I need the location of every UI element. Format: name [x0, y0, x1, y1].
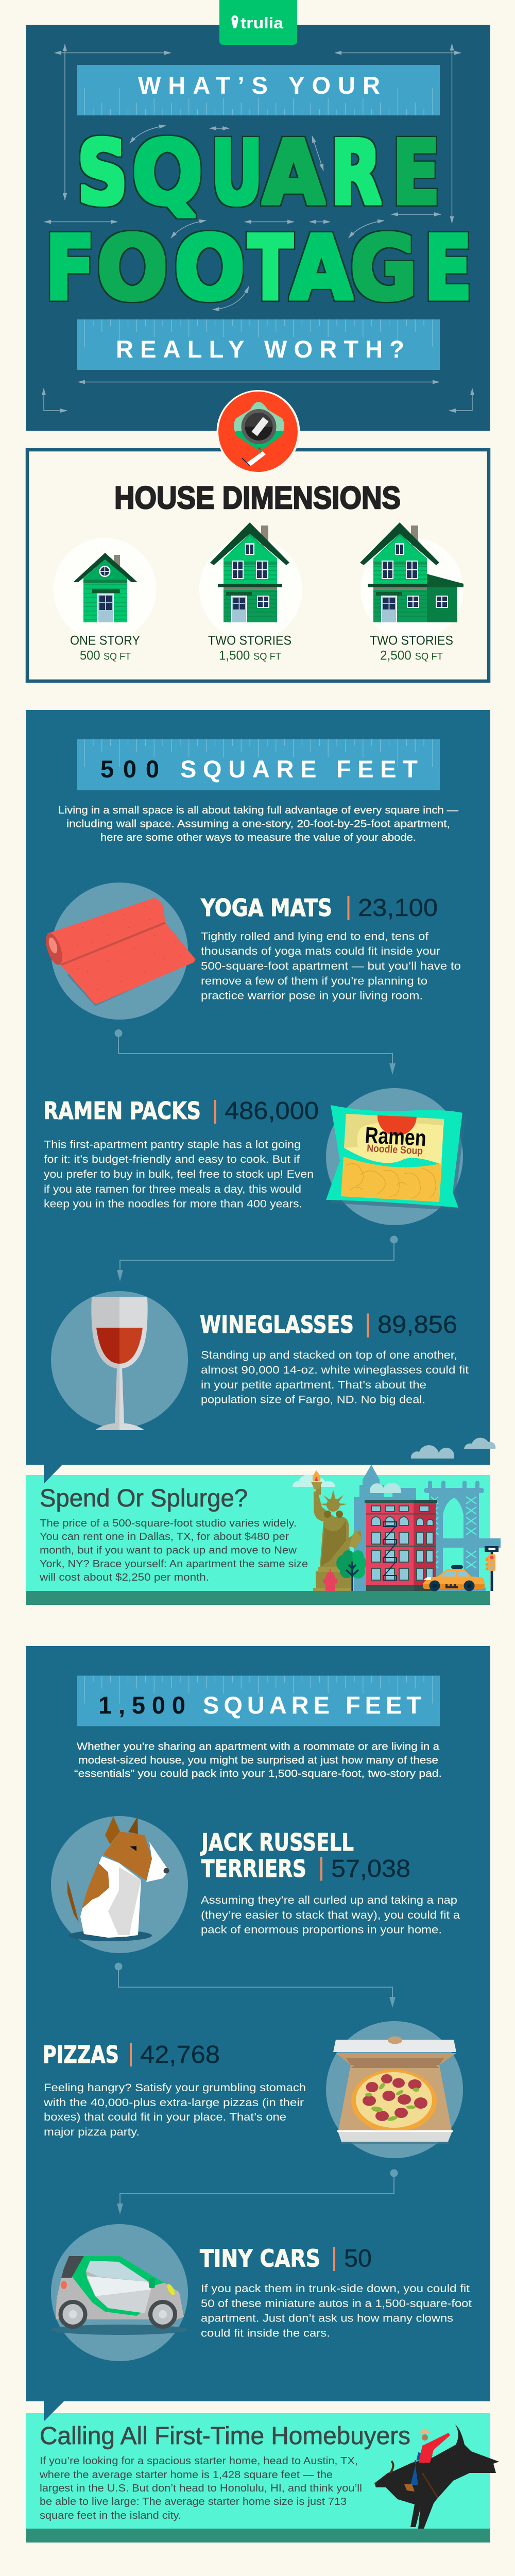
callout text: If you’re looking for a spacious starter home, head to Austin, TX,	[40, 2455, 358, 2467]
logo tab: trulia: trulia	[241, 14, 284, 32]
tree	[336, 1550, 367, 1591]
fire escape	[383, 1522, 397, 1580]
heading: calling all first-time homebuyers: Calling All First-Time Homebuyers	[40, 2422, 410, 2450]
panel: 500 square feet	[26, 710, 495, 1465]
labels: one story	[70, 634, 140, 663]
item: jack russell terriers: pack of enormous proportions in your home.	[201, 1924, 442, 1936]
item: pizzas: major pizza party.	[44, 2126, 140, 2138]
title: square footage: E	[424, 216, 472, 320]
item: wineglasses	[200, 1311, 469, 1405]
title: square footage: A	[290, 216, 352, 320]
item: wineglasses: population size of Fargo, ND. No big deal.	[201, 1394, 425, 1405]
item: wineglasses: in your petite apartment. That’s about the	[201, 1379, 426, 1391]
item: tiny cars: If you pack them in trunk-side down, you could fit	[201, 2283, 470, 2295]
title: square footage: S	[77, 121, 128, 225]
item: pizzas: boxes) that could fit in your place. That’s one	[44, 2111, 286, 2123]
item: tiny cars: 50	[344, 2245, 372, 2272]
item: jack russell terriers: Assuming they’re all curled up and taking a nap	[201, 1894, 457, 1906]
arrow: connector to pizzas	[114, 1963, 396, 2008]
intro text: Whether you’re sharing an apartment with a roommate or are living in a	[77, 1741, 440, 1753]
item: tiny cars: apartment. Just don’t ask us how many clowns	[201, 2312, 453, 2325]
intro text: Living in a small space is all about taking full advantage of every square inch —	[58, 805, 458, 816]
title: square footage: A	[263, 121, 324, 225]
labels: one story: ONE STORY	[70, 634, 140, 648]
taxi	[423, 1565, 485, 1591]
logo tab: trulia	[219, 0, 297, 45]
labels: two stories 2500: 2,500 SQ FT	[380, 648, 443, 663]
illustration: new york city	[293, 1465, 501, 1591]
intro text: including wall space. Assuming a one-story, 20-foot-by-25-foot apartment,	[66, 818, 450, 829]
item: wineglasses: almost 90,000 14-oz. white wineglasses could fit	[201, 1364, 469, 1376]
icon: wineglass	[51, 1291, 188, 1430]
item: pizzas: Feeling hangry? Satisfy your grumbling stomach	[44, 2082, 306, 2094]
item: ramen packs: 486,000	[225, 1097, 319, 1125]
item: tiny cars	[200, 2244, 472, 2339]
speech tail	[44, 2401, 64, 2421]
house: two stories 1500	[199, 522, 302, 641]
icon: ramen pack	[326, 1088, 466, 1225]
callout text: month, but if you want to pack up and move to New	[40, 1545, 297, 1556]
item: ramen packs: if you ate ramen for three meals a day, this would	[44, 1183, 301, 1195]
measuring arrows	[44, 44, 472, 411]
item: yoga mats: remove a few of them if you’re planning to	[201, 975, 427, 987]
ruler heading: 500 square feet	[77, 739, 440, 790]
callout text: where the average starter home is 1,428 square feet — the	[39, 2469, 333, 2481]
intro text	[58, 805, 458, 843]
ruler heading: 1500 square feet: SQUARE FEET	[203, 1691, 421, 1719]
item: tiny cars: 50 of these miniature autos in a 1,500-square-foot	[201, 2298, 472, 2310]
title: square footage	[45, 121, 472, 320]
arrow: connector to ramen	[114, 1029, 396, 1075]
callout text: will cost about $2,250 per month.	[39, 1572, 209, 1583]
ruler heading: what's your: WHAT’S YOUR	[138, 72, 380, 99]
intro text: here are some other ways to measure the value of your abode.	[100, 832, 416, 843]
ruler heading: really worth: REALLY WORTH?	[116, 335, 404, 363]
item: pizzas	[43, 2041, 306, 2138]
item: pizzas: 42,768	[140, 2041, 220, 2069]
traffic light	[485, 1546, 499, 1591]
arrow: connector to tiny cars	[117, 2169, 398, 2214]
item: jack russell terriers: TERRIERS	[201, 1855, 306, 1883]
callout: first-time homebuyers	[26, 2401, 499, 2543]
item: pizzas: PIZZAS	[43, 2041, 119, 2069]
heading: spend or splurge: Spend Or Splurge?	[40, 1485, 248, 1512]
title: square footage: G	[350, 216, 417, 320]
icon: ramen pack: Ramen	[364, 1123, 427, 1151]
callout: spend or splurge	[26, 1465, 501, 1605]
item: yoga mats	[200, 894, 461, 1002]
labels: two stories 1500: 1,500 SQ FT	[219, 648, 281, 663]
item: pizzas: with the 40,000-plus extra-large pizzas (in their	[43, 2097, 304, 2109]
item: ramen packs: keep you in the noodles for more than 400 years.	[44, 1198, 302, 1210]
callout text: The price of a 500-square-foot studio varies widely.	[40, 1518, 297, 1529]
title: square footage: T	[248, 216, 293, 320]
item: tiny cars: could fit inside the cars.	[201, 2328, 330, 2339]
title: square footage: U	[211, 121, 263, 225]
item: ramen packs: This first-apartment pantry staple has a lot going	[44, 1139, 301, 1151]
icon: clouds	[411, 1438, 495, 1459]
intro text	[74, 1741, 442, 1780]
title: square footage: O	[174, 216, 245, 320]
title: square footage: E	[392, 121, 440, 225]
icon: pizza box	[326, 2021, 463, 2158]
ruler heading: 500 square feet: 500	[100, 755, 159, 783]
speech tail	[44, 1465, 62, 1484]
intro text: “essentials” you could pack into your 1,500-square-foot, two-story pad.	[74, 1768, 442, 1780]
title: square footage: F	[45, 216, 95, 320]
callout text: largest in the U.S. But don’t head to Honolulu, HI, and think you’ll	[40, 2483, 362, 2494]
heading: house dimensions: HOUSE DIMENSIONS	[114, 480, 401, 515]
callout text: square feet in the island city.	[40, 2510, 181, 2521]
callout text	[39, 2455, 362, 2521]
item: ramen packs: RAMEN PACKS	[43, 1097, 201, 1125]
item: yoga mats: 23,100	[358, 894, 438, 922]
clouds	[293, 1475, 335, 1487]
item: ramen packs: for it: it’s budget-friendly and easy to cook. But if	[44, 1154, 300, 1165]
panel: house dimensions	[27, 450, 489, 681]
illustration: bull rider	[374, 2425, 499, 2529]
ruler heading: 1500 square feet: 1,500	[98, 1691, 185, 1719]
ruler heading: 1500 square feet	[77, 1675, 440, 1726]
item: yoga mats: 500-square-foot apartment — but you’ll have to	[201, 960, 461, 972]
item: wineglasses: Standing up and stacked on top of one another,	[201, 1349, 457, 1361]
labels: two stories 1500	[208, 634, 291, 663]
hydrant	[323, 1569, 337, 1591]
item: wineglasses: 89,856	[377, 1311, 457, 1338]
callout text: York, NY? Brace yourself: An apartment the same size	[40, 1558, 308, 1570]
labels: one story: 500 SQ FT	[80, 648, 131, 663]
panel: header	[26, 0, 490, 431]
item: wineglasses: WINEGLASSES	[200, 1311, 354, 1338]
item: ramen packs: you prefer to buy in bulk, feel free to stock up! Even	[44, 1168, 314, 1180]
item: yoga mats: thousands of yoga mats could fit inside your	[201, 945, 440, 957]
title: square footage: Q	[132, 121, 203, 225]
ruler heading: really worth	[77, 319, 440, 370]
item: yoga mats: practice warrior pose in your living room.	[201, 990, 423, 1002]
callout text	[39, 1518, 308, 1583]
arrow: connector to wineglasses	[117, 1235, 398, 1281]
item: yoga mats: YOGA MATS	[200, 894, 332, 922]
intro text: modest-sized house, you might be surprised at just how many of these	[78, 1755, 438, 1766]
ruler heading: 500 square feet: SQUARE FEET	[180, 755, 418, 783]
item: jack russell terriers: 57,038	[331, 1855, 410, 1883]
item: tiny cars: TINY CARS	[200, 2244, 320, 2272]
item: jack russell terriers: JACK RUSSELL	[200, 1828, 354, 1856]
labels: two stories 2500	[370, 634, 453, 663]
item: jack russell terriers	[200, 1828, 460, 1936]
item: yoga mats: Tightly rolled and lying end to end, tens of	[201, 930, 428, 943]
panel: 1500 square feet	[26, 1646, 490, 2401]
item: ramen packs	[43, 1097, 319, 1210]
statue of liberty	[311, 1470, 362, 1591]
brick building	[365, 1500, 437, 1591]
icon: tape measure badge	[216, 390, 300, 473]
labels: two stories 1500: TWO STORIES	[208, 634, 291, 648]
house: two stories 2500	[360, 522, 464, 641]
icon: tiny car	[51, 2224, 188, 2361]
item: jack russell terriers: (they’re easier to stack that way), you could fit a	[201, 1909, 460, 1921]
icon: yoga mat	[43, 883, 197, 1020]
icon: jack russell terrier	[51, 1816, 188, 1953]
callout text: You can rent one in Dallas, TX, for about $480 per	[40, 1531, 289, 1543]
title: square footage: O	[97, 216, 168, 320]
callout text: be able to live large: The average starter home size is just 713	[40, 2496, 347, 2507]
icon: ramen pack: Noodle Soup	[367, 1143, 423, 1157]
skyline	[354, 1465, 501, 1591]
house: one story	[54, 538, 157, 641]
ruler heading: what's your	[77, 65, 440, 115]
title: square footage: R	[331, 121, 381, 225]
labels: two stories 2500: TWO STORIES	[370, 634, 453, 648]
